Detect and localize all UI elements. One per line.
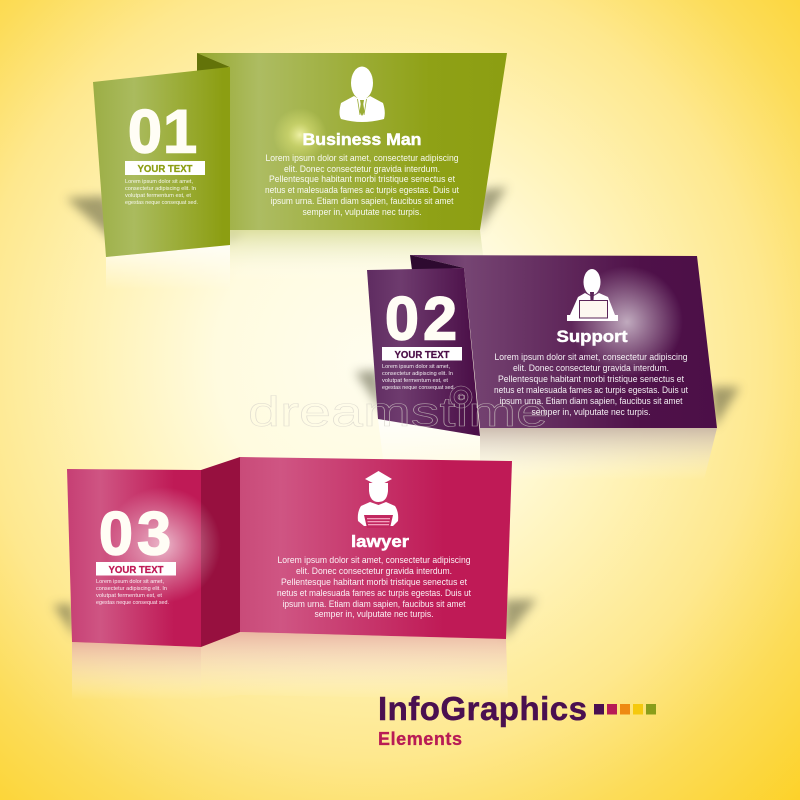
glow xyxy=(105,487,221,603)
label bar xyxy=(382,347,462,361)
shadows: green panel xyxy=(66,187,507,248)
subtitle: Elements xyxy=(378,729,462,749)
small text: consectetur adipiscing elit. In xyxy=(125,186,196,192)
heading: lawyer xyxy=(351,532,409,551)
panel: 02 support xyxy=(355,255,740,480)
body text: Pellentesque habitant morbi tristique senectus et xyxy=(498,374,684,384)
small text: volutpat fermentum est, et xyxy=(125,193,192,199)
body text: Lorem ipsum dolor sit amet, consectetur adipiscing xyxy=(266,153,458,163)
small text xyxy=(382,364,455,391)
body text: Pellentesque habitant morbi tristique senectus et xyxy=(281,577,467,587)
body text xyxy=(494,352,688,417)
shadows: purple panel xyxy=(355,370,740,428)
heading: Business Man xyxy=(302,130,422,149)
small text: Lorem ipsum dolor sit amet, xyxy=(96,579,165,585)
small text xyxy=(125,179,198,206)
body text: netus et malesuada fames ac turpis egestas. Duis ut xyxy=(277,588,471,598)
fold xyxy=(201,457,240,647)
number 03: 03 xyxy=(99,500,171,568)
fold xyxy=(410,255,464,270)
small text: egestas neque consequat sed. xyxy=(382,385,455,391)
body text: elit. Donec consectetur gravida interdum. xyxy=(513,363,669,373)
body text xyxy=(277,555,471,619)
icon: support desk xyxy=(567,269,618,321)
main sheet xyxy=(197,53,507,230)
reflection: green panel xyxy=(106,230,486,290)
small text: Lorem ipsum dolor sit amet, xyxy=(125,179,194,185)
panel: 01 business man xyxy=(66,53,507,290)
body text: Pellentesque habitant morbi tristique senectus et xyxy=(269,174,455,184)
left sheet xyxy=(67,469,201,647)
label bar: YOUR TEXT xyxy=(138,163,193,175)
body text: netus et malesuada fames ac turpis egestas. Duis ut xyxy=(494,385,688,395)
label bar xyxy=(96,562,176,576)
body text: ipsum urna. Etiam diam sapien, faucibus sit amet xyxy=(500,396,683,406)
body text: netus et malesuada fames ac turpis egestas. Duis ut xyxy=(265,185,459,195)
main sheet xyxy=(410,255,717,428)
colour squares xyxy=(594,704,656,714)
left sheet xyxy=(93,67,230,257)
panel: 03 lawyer xyxy=(53,457,537,700)
reflection: purple panel xyxy=(378,419,717,480)
number 01: 01 xyxy=(128,98,197,166)
small text xyxy=(96,579,169,606)
small text: egestas neque consequat sed. xyxy=(96,600,169,606)
body text: ipsum urna. Etiam diam sapien, faucibus sit amet xyxy=(270,196,454,206)
small text: volutpat fermentum est, et xyxy=(96,593,163,599)
body text: semper in, vulputate nec turpis. xyxy=(302,207,422,217)
small text: Lorem ipsum dolor sit amet, xyxy=(382,364,451,370)
small text: volutpat fermentum est, et xyxy=(382,378,449,384)
title block xyxy=(378,690,656,749)
fold xyxy=(197,53,230,73)
body text xyxy=(265,153,459,217)
body text: elit. Donec consectetur gravida interdum. xyxy=(284,164,440,174)
main sheet xyxy=(240,457,512,639)
body text: ipsum urna. Etiam diam sapien, faucibus sit amet xyxy=(282,599,466,609)
watermark: dreamstime xyxy=(248,388,548,435)
shadows: magenta panel xyxy=(53,599,537,640)
glow xyxy=(273,108,327,162)
small text: consectetur adipiscing elit. In xyxy=(382,371,453,377)
body text: Lorem ipsum dolor sit amet, consectetur adipiscing xyxy=(278,555,470,565)
icon: business man xyxy=(340,66,385,122)
heading: Support xyxy=(556,327,628,346)
reflection: magenta panel xyxy=(72,632,508,700)
number 02: 02 xyxy=(385,284,457,352)
label bar: YOUR TEXT xyxy=(108,564,164,576)
body text: semper in, vulputate nec turpis. xyxy=(532,407,650,417)
body text: Lorem ipsum dolor sit amet, consectetur adipiscing xyxy=(494,352,688,362)
label bar: YOUR TEXT xyxy=(394,349,450,361)
body text: elit. Donec consectetur gravida interdum. xyxy=(296,566,452,576)
small text: egestas neque consequat sed. xyxy=(125,200,198,206)
glow xyxy=(571,266,683,378)
small text: consectetur adipiscing elit. In xyxy=(96,586,167,592)
label bar xyxy=(125,161,205,175)
title: InfoGraphics xyxy=(378,690,587,727)
left sheet xyxy=(367,268,480,436)
icon: lawyer xyxy=(358,471,398,528)
body text: semper in, vulputate nec turpis. xyxy=(314,609,434,619)
